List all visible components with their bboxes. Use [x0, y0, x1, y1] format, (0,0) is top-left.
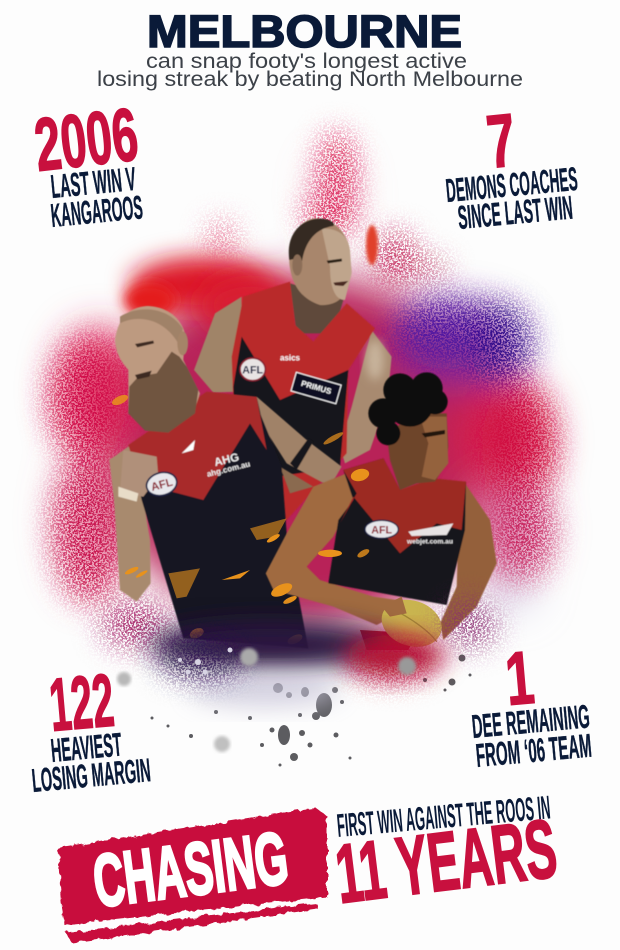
subtitle: losing streak by beating North Melbourne [97, 68, 523, 91]
dark powder base under players [150, 603, 496, 706]
football [360, 592, 448, 654]
powder: right purple and red [395, 300, 554, 578]
infographic canvas: KANGAROOS [49, 188, 144, 234]
subtitle [97, 50, 523, 91]
player: front right: AFL [371, 524, 393, 536]
stat label [444, 160, 579, 236]
stat: 2006 last win v Kangaroos: 2006 [30, 92, 142, 187]
stat: 122 heaviest losing margin: 122 [46, 658, 117, 747]
stat: 2006 last win v Kangaroos [30, 92, 144, 234]
stat: 122 heaviest losing margin [30, 658, 152, 799]
powder splash background [50, 132, 554, 647]
stat: 7 Demons coaches [444, 97, 579, 236]
player: front right [266, 372, 497, 640]
player: back centre: PRIMUS [300, 379, 333, 396]
player: back centre: AFL [242, 364, 264, 376]
powder: left magenta [50, 338, 169, 647]
ink splatter [117, 654, 472, 766]
title: MELBOURNE [147, 6, 462, 57]
players [109, 218, 497, 654]
player: left with beard: AFL [150, 477, 174, 494]
closing line: first win against the Roos [331, 788, 562, 921]
orange embers [110, 393, 371, 646]
player: front right: webjet.com.au [406, 538, 453, 545]
stat label [30, 726, 152, 799]
chasing word: CHASING [89, 816, 292, 923]
player: left with beard [109, 306, 342, 648]
red vertical smear near plume [366, 225, 378, 265]
stat label: HEAVIEST [49, 726, 123, 769]
powder: pink plume [210, 132, 446, 284]
chasing brush banner [58, 808, 327, 943]
player: left with beard: AHG [213, 451, 241, 469]
infographic canvas: LOSING MARGIN [30, 751, 152, 799]
title [97, 6, 523, 91]
stat: 1 Dee remaining: 1 [502, 635, 537, 721]
player: back centre: asics [280, 354, 301, 363]
infographic canvas: LAST WIN V [49, 160, 137, 205]
stat: 1 Dee remaining [470, 635, 593, 774]
stat label [470, 697, 593, 774]
player: back centre [194, 218, 392, 520]
stat label [49, 160, 144, 234]
player: left with beard: ahg.com.au [206, 459, 251, 479]
subtitle: can snap footy's longest active [146, 50, 467, 73]
stat: 7 Demons coaches: 7 [483, 97, 520, 184]
